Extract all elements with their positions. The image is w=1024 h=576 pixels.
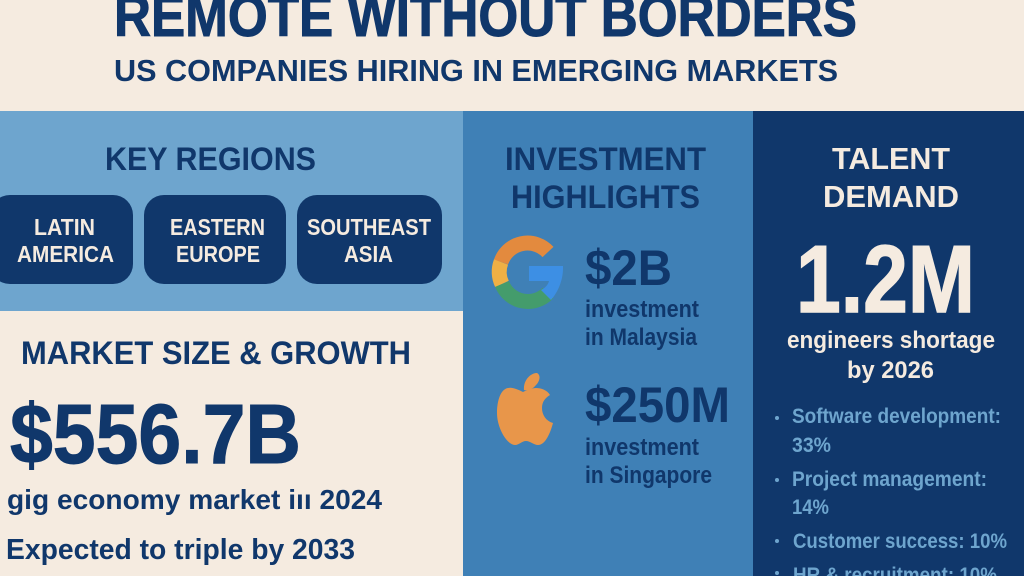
big number: market size: $556.7B <box>10 387 301 481</box>
region chip: Southeast Asia: ASIA <box>344 241 393 267</box>
region chip: Latin America: AMERICA <box>17 241 114 267</box>
text: engineers shortage by 2026: by 2026 <box>847 357 934 384</box>
heading: talent demand: TALENT <box>832 141 950 176</box>
list: roles in demand: Software development: <box>792 405 1001 428</box>
investment: Google: investment <box>585 296 699 323</box>
list: roles in demand: Project management: <box>792 468 987 491</box>
icon: Google G logo <box>499 243 563 301</box>
text: growth expectation: Expected to triple by 2033 <box>6 534 355 566</box>
big number: engineers shortage: 1.2M <box>796 226 975 333</box>
investment: Google <box>585 240 699 351</box>
investment: Apple: $250M <box>585 377 730 433</box>
panel: key regions <box>0 111 463 311</box>
subtitle: US COMPANIES HIRING IN EMERGING MARKETS <box>114 53 838 88</box>
heading: talent demand: DEMAND <box>823 179 959 214</box>
list: roles in demand: 33% <box>792 434 831 457</box>
region chip: Latin America: LATIN <box>34 214 95 240</box>
region chip: Southeast Asia: SOUTHEAST <box>307 214 431 240</box>
investment: Apple: in Singapore <box>585 462 712 489</box>
panel: talent demand <box>753 111 1024 576</box>
region chip: Latin America <box>0 195 133 284</box>
text: gig economy market: gig economy market iıı 2024 <box>7 484 382 515</box>
icon: Apple logo <box>497 373 553 445</box>
heading: investment highlights: HIGHLIGHTS <box>511 179 700 215</box>
investment: Google: $2B <box>585 240 672 296</box>
region chip: Eastern Europe: EUROPE <box>176 241 260 267</box>
panel: market size and growth <box>0 311 463 576</box>
panel: investment highlights <box>463 111 753 576</box>
heading: investment highlights: INVESTMENT <box>505 141 706 177</box>
heading: talent demand <box>823 141 959 214</box>
investment: Apple: investment <box>585 434 699 461</box>
heading: key regions: KEY REGIONS <box>105 141 316 177</box>
list: roles in demand: 14% <box>792 496 829 519</box>
investment: Apple <box>585 377 730 489</box>
investment: Google: in Malaysia <box>585 324 698 351</box>
list: roles in demand <box>775 405 1007 576</box>
heading: market size: MARKET SIZE & GROWTH <box>21 335 411 371</box>
text: engineers shortage by 2026: engineers shortage <box>787 327 995 354</box>
text: engineers shortage by 2026 <box>787 327 995 384</box>
region chip: Southeast Asia <box>297 195 442 284</box>
header panel <box>0 0 1024 111</box>
region chip: Eastern Europe <box>144 195 286 284</box>
region chip: Eastern Europe: EASTERN <box>170 214 265 240</box>
heading: investment highlights <box>505 141 706 215</box>
